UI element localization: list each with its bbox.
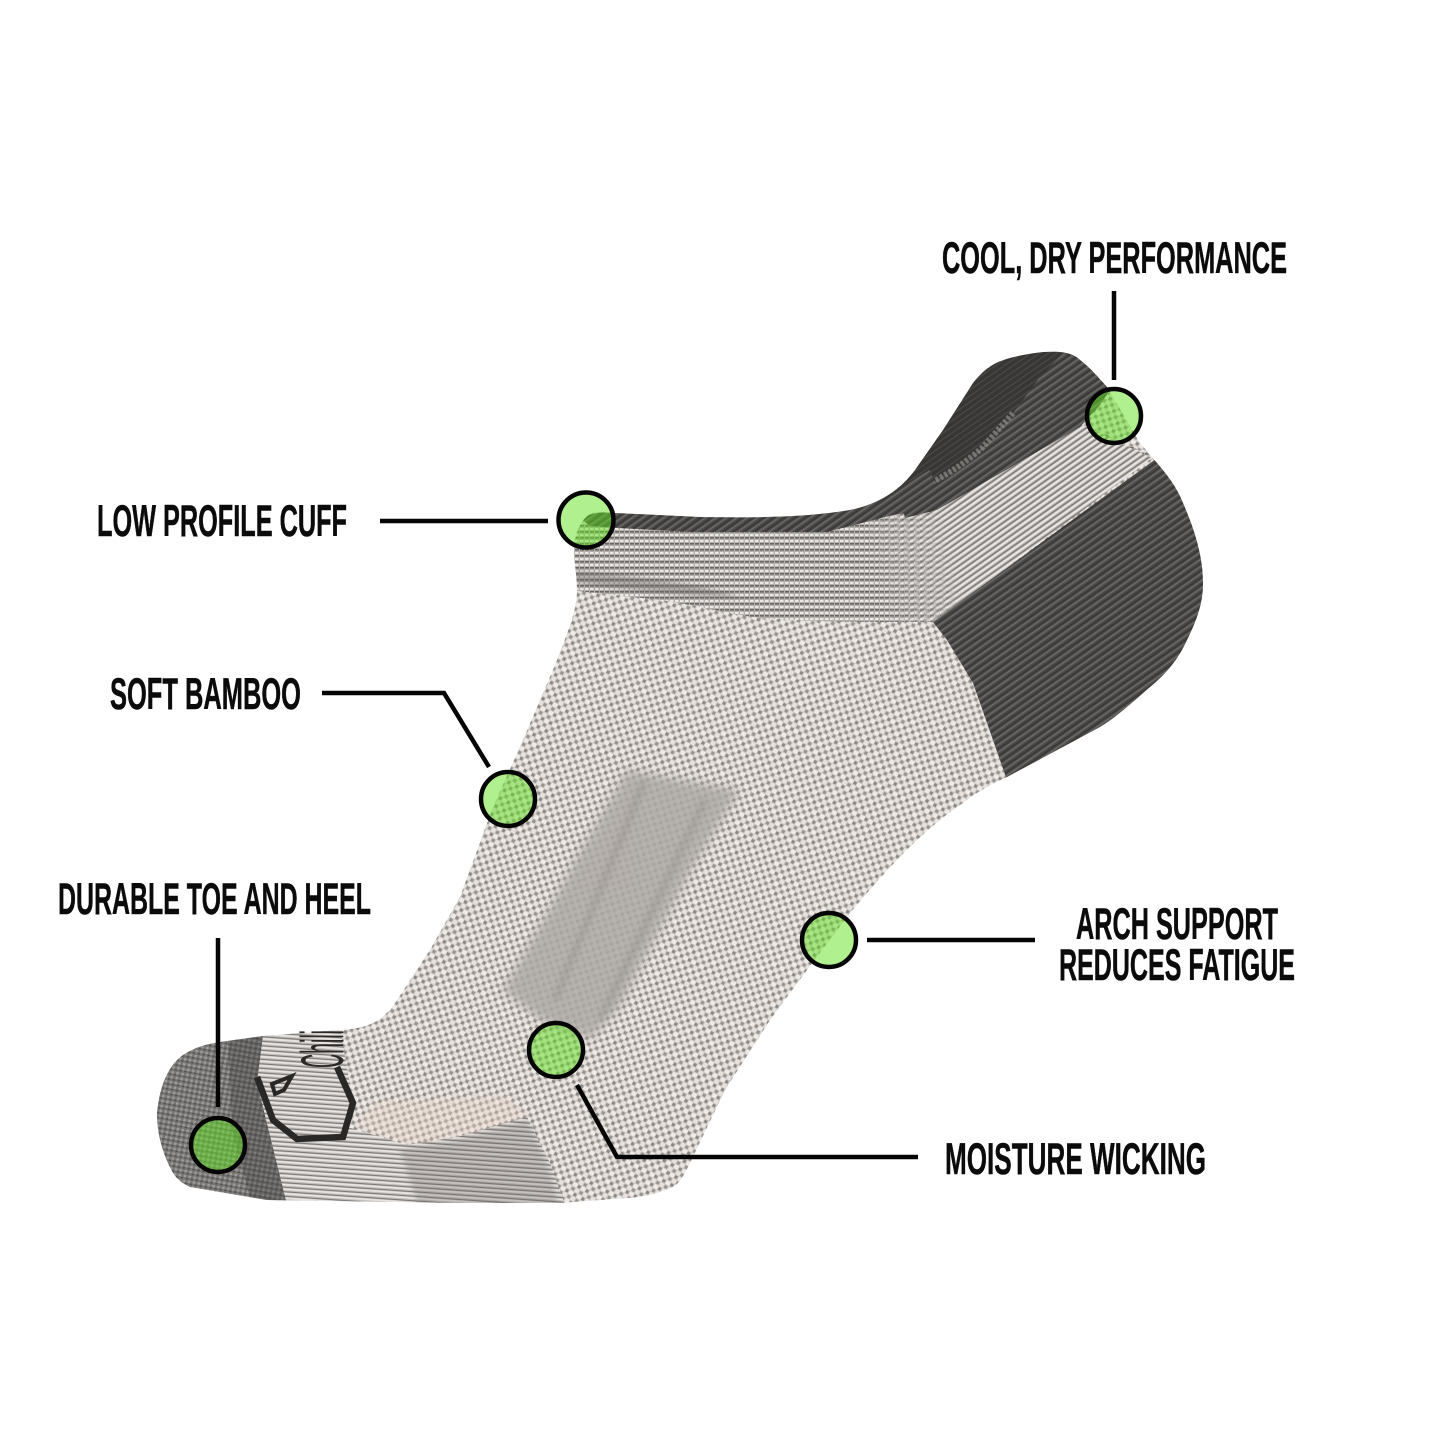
callout: cool, dry performance <box>942 234 1287 443</box>
callout: soft bamboo: SOFT BAMBOO <box>110 670 301 719</box>
sock logo <box>257 1030 356 1139</box>
darker toe shading <box>228 1034 287 1205</box>
light heel band <box>860 425 1152 622</box>
callout: soft bamboo <box>110 670 535 826</box>
callout: durable toe and heel: DURABLE TOE AND HEEL <box>58 875 371 924</box>
callout: arch support reduces fatigue: ARCH SUPPORT <box>1076 900 1278 949</box>
callout: low profile cuff: LOW PROFILE CUFF <box>97 497 347 546</box>
ribbed cuff <box>560 425 1150 622</box>
peach dimple patch <box>357 1095 527 1145</box>
cuff shadow <box>570 570 740 598</box>
callout: moisture wicking <box>529 1023 1206 1184</box>
toe knit stripe and sole panel <box>257 1028 567 1210</box>
sock base knit <box>157 352 1203 1203</box>
sock illustration: Chili <box>289 1030 356 1068</box>
outer back tab <box>900 353 1110 518</box>
fuzzy tab ridge <box>933 411 1015 484</box>
sock illustration <box>150 335 1215 1210</box>
dark cuff band <box>581 470 940 532</box>
back tab lining <box>871 352 1093 512</box>
sole panel shading <box>400 1120 560 1210</box>
callout: durable toe and heel <box>58 875 371 1172</box>
callout: arch support reduces fatigue <box>802 900 1295 990</box>
arch support panel <box>503 770 740 1040</box>
arch panel streaks <box>555 780 705 1020</box>
grey toe cap <box>157 1036 286 1200</box>
callout: moisture wicking: MOISTURE WICKING <box>945 1135 1206 1184</box>
dark heel <box>933 458 1215 780</box>
